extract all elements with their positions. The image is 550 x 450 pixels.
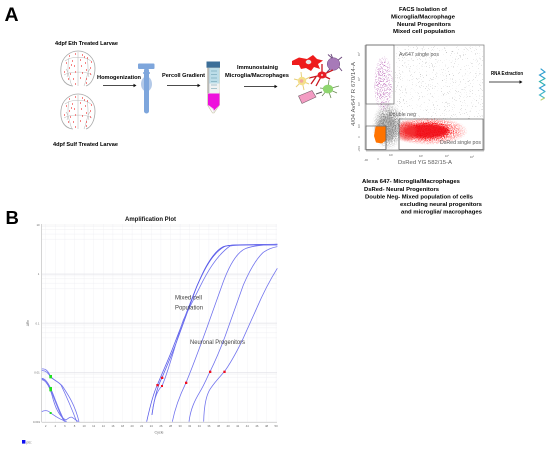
- plot grid: [42, 224, 277, 422]
- label: immunostaining: Immunostainig: [237, 65, 278, 71]
- arrow: RNA extraction: [489, 80, 522, 84]
- red core: [403, 124, 449, 138]
- cell: yellow astrocyte: [294, 72, 310, 90]
- legend: p/s: p/s:: [26, 440, 32, 444]
- legend text: population definitions: and microglia/ macrophages: [401, 210, 482, 216]
- x axis ticks: 50: [275, 424, 278, 428]
- x axis ticks: 6: [64, 424, 66, 428]
- label: immunostaining: Microglia/Macrophages: [225, 73, 289, 79]
- x axis ticks: 48: [265, 424, 268, 428]
- purple events: [374, 56, 393, 112]
- cell: red neuron: [309, 64, 333, 86]
- y tick labels: 0: [357, 136, 361, 138]
- y axis ticks: 0.001: [33, 420, 40, 424]
- x axis ticks: 16: [111, 424, 115, 428]
- arrow: homogenization: [103, 84, 136, 87]
- y axis label: 4/04 Av647 R 670/14-A: [351, 61, 357, 126]
- label: Percoll gradient: Percoll Gradient: [162, 73, 205, 79]
- legend text: population definitions: DsRed- Neural Progenitors: [364, 187, 439, 193]
- label: Eth treated larvae: 4dpf Eth Treated Larvae: [55, 41, 118, 47]
- x axis ticks: 30: [179, 424, 182, 428]
- icon: gradient tube: [206, 62, 220, 113]
- label: RNA extraction: RNA Extraction: [491, 71, 523, 77]
- icon: stained cells: [292, 54, 342, 104]
- y axis ticks: [33, 223, 40, 424]
- heading: FACS isolation: FACS Isolation of: [399, 7, 447, 13]
- x tick labels: 0: [377, 157, 379, 161]
- x axis ticks: 8: [74, 424, 76, 428]
- y axis ticks: 0.1: [36, 322, 40, 326]
- y axis ticks: 10: [36, 223, 40, 227]
- x axis ticks: 12: [92, 424, 96, 428]
- x axis ticks: 2: [45, 424, 47, 428]
- x axis ticks: 42: [236, 424, 240, 428]
- label: homogenization: Homogenization: [97, 75, 141, 81]
- x axis ticks: 18: [121, 424, 124, 428]
- gate label: double negative: Double neg: [389, 112, 416, 118]
- x axis ticks: 36: [207, 424, 211, 428]
- cell: red macrophage: [292, 55, 323, 71]
- x axis ticks: 26: [159, 424, 163, 428]
- x axis ticks: 44: [246, 424, 249, 428]
- x axis ticks: 14: [102, 424, 105, 428]
- y tick labels: 10⁵: [357, 52, 361, 56]
- x axis ticks: 24: [150, 424, 153, 428]
- x axis ticks: 38: [217, 424, 220, 428]
- icon: RNA strand: [540, 69, 545, 100]
- y tick labels: [357, 52, 361, 152]
- early cycle curves: [42, 369, 79, 422]
- y tick labels: -204: [357, 146, 361, 152]
- arrow: immunostaining: [244, 85, 278, 88]
- label: immunostaining: [225, 65, 289, 79]
- y axis ticks: 0.01: [34, 370, 40, 374]
- cell: purple microglia: [327, 54, 342, 72]
- orange population: [374, 126, 386, 144]
- y tick labels: 10⁴: [357, 76, 361, 81]
- arrow: Percoll gradient: [167, 84, 200, 87]
- cell: pink cylinder: [298, 90, 322, 104]
- x tick labels: [364, 153, 474, 162]
- x tick labels: 10⁴: [445, 154, 450, 158]
- x axis ticks: 22: [140, 424, 144, 428]
- x axis label: Cycle: [154, 430, 164, 434]
- sparse grey events: [388, 46, 483, 119]
- x axis ticks: 40: [227, 424, 230, 428]
- icon: Eth treated larvae: [61, 51, 95, 86]
- x axis label: DsRed YG 582/15-A: [398, 160, 453, 166]
- legend text: population definitions: excluding neural progenitors: [400, 202, 482, 208]
- icon: homogenizer: [138, 64, 154, 114]
- chart title: Amplification Plot: [125, 217, 176, 223]
- gates: [366, 45, 484, 150]
- legend text: population definitions: Alexa 647- Microglia/Macrophages: [362, 179, 460, 185]
- x axis ticks: 46: [255, 424, 259, 428]
- chart: amplification plot: [26, 223, 278, 434]
- gate label: DsRed: DsRed single pos: [440, 140, 481, 146]
- x axis ticks: 10: [83, 424, 86, 428]
- x axis ticks: [45, 424, 278, 428]
- red threshold markers: [156, 371, 226, 387]
- panel label B: B: [6, 207, 19, 228]
- grey double negative cluster: [372, 102, 404, 150]
- legend text: population definitions: Double Neg- Mixed population of cells: [365, 194, 473, 200]
- red DsRed population: [400, 118, 468, 145]
- annotation: mixed cell population: Mixed cell: [175, 294, 202, 302]
- heading: FACS isolation: Neural Progenitors: [397, 22, 451, 28]
- y axis label: ΔRn: [26, 320, 30, 326]
- y tick labels: 10³: [357, 102, 361, 106]
- cell: green microglia: [320, 80, 339, 98]
- x tick labels: 10³: [419, 154, 423, 158]
- gate label: Av647: Av647 single pos: [399, 52, 439, 58]
- legend: p/s: [22, 440, 32, 444]
- x axis ticks: 34: [198, 424, 201, 428]
- x axis ticks: 4: [55, 424, 57, 428]
- x tick labels: 10⁵: [470, 155, 474, 159]
- heading: FACS isolation: Microglia/Macrophage: [391, 14, 455, 20]
- icon: Sulf treated larvae: [61, 94, 95, 129]
- annotation: mixed cell population: Population: [175, 304, 204, 312]
- label: Sulf treated larvae: 4dpf Sulf Treated Larvae: [53, 142, 118, 148]
- y axis ticks: 1: [38, 272, 40, 276]
- green threshold markers: [49, 375, 52, 414]
- legend text: population definitions: [362, 179, 482, 216]
- heading: FACS isolation: [391, 7, 455, 35]
- annotation: neuronal progenitors: Neuronal Progenitors: [190, 339, 245, 346]
- chart: FACS scatter plot: [351, 45, 484, 166]
- red speckle: [400, 118, 468, 145]
- x axis ticks: 20: [131, 424, 134, 428]
- y tick labels: 10²: [357, 124, 361, 128]
- heading: FACS isolation: Mixed cell population: [393, 29, 455, 35]
- grey haze: [377, 115, 397, 141]
- red left shoulder: [398, 122, 416, 140]
- annotation: mixed cell population: [175, 294, 204, 312]
- x axis ticks: 28: [169, 424, 172, 428]
- panel label A: A: [4, 4, 19, 26]
- x tick labels: 10²: [389, 153, 393, 157]
- x axis ticks: 32: [188, 424, 192, 428]
- amplification curves: [147, 244, 277, 422]
- x tick labels: -90: [364, 158, 368, 162]
